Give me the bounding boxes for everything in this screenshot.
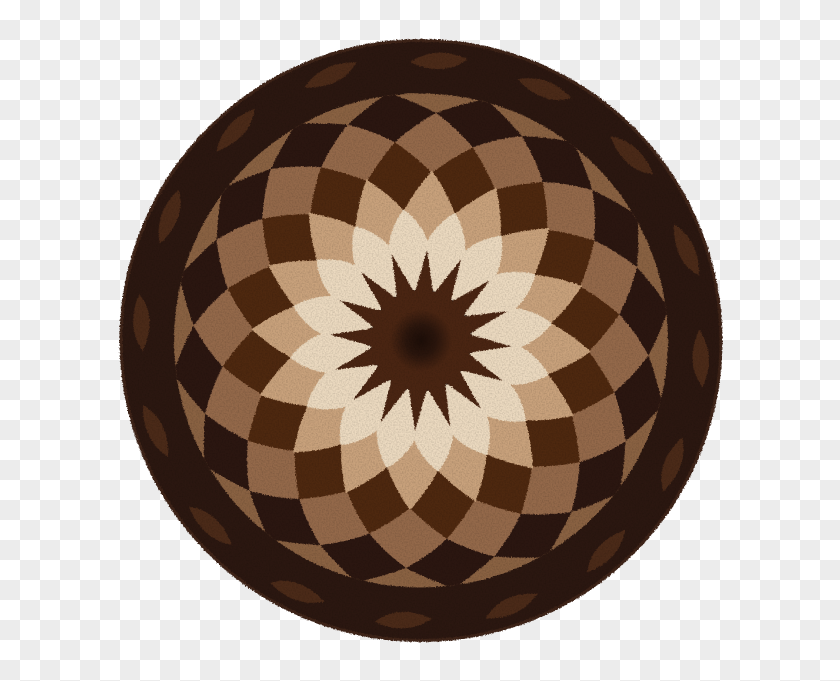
ring: very dark cells	[167, 87, 675, 594]
ring: tan cells	[250, 169, 592, 512]
ring: dark brown cells	[218, 138, 624, 543]
rug base and outer border	[121, 40, 721, 640]
dark centre star	[330, 249, 512, 432]
round rug	[121, 40, 721, 640]
border leaf motifs	[131, 51, 711, 630]
ring: medium brown cells	[191, 110, 651, 571]
lattice medallion	[174, 93, 669, 588]
ring: cream petals	[288, 207, 554, 474]
ring: thin outer crescents	[174, 93, 669, 588]
